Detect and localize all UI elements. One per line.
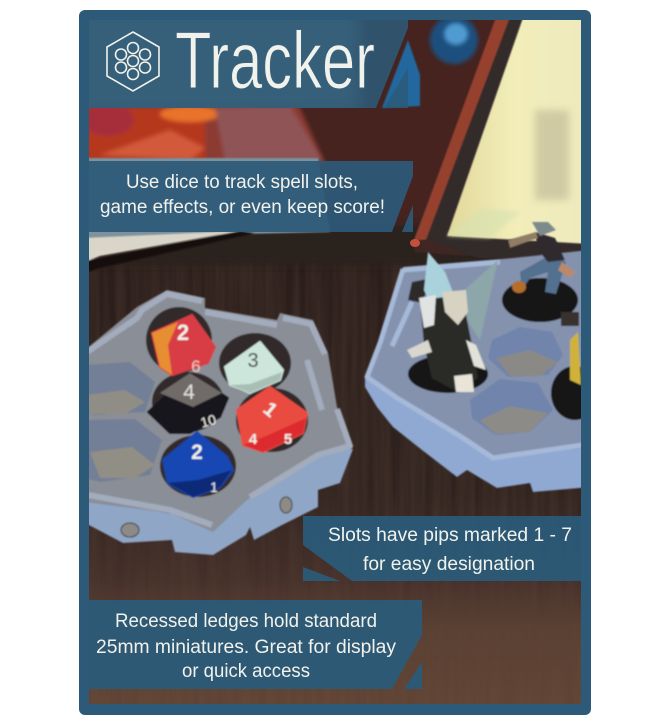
d6 black	[148, 373, 228, 433]
d6 orange	[152, 315, 215, 376]
callout text: Slots have pips marked 1 - 7	[328, 525, 572, 546]
frame	[79, 10, 591, 715]
tray raised rim	[87, 294, 350, 525]
callout text: or quick access	[182, 661, 310, 682]
tray raised rim	[367, 262, 590, 458]
tray top	[85, 290, 353, 532]
d6 red	[237, 387, 307, 452]
callout text	[96, 611, 396, 682]
callout text: Recessed ledges hold standard	[115, 611, 377, 632]
empty well	[470, 379, 553, 435]
callout text: game effects, or even keep score!	[100, 197, 385, 218]
backdrop behind title	[89, 20, 359, 108]
well with base	[502, 278, 578, 322]
well with base	[550, 366, 581, 421]
icon: hexagonal tray logo	[107, 32, 159, 91]
d6 red: 5	[284, 431, 292, 448]
d6 orange: 6	[191, 357, 201, 376]
d6 blue	[163, 432, 233, 497]
dice in background	[382, 16, 478, 108]
callout text	[328, 525, 572, 575]
callout: dice tracking	[89, 161, 413, 232]
callout text: for easy designation	[363, 554, 535, 575]
dark tray hole	[408, 278, 426, 303]
d6 blue: 1	[210, 479, 218, 495]
callout: pips	[303, 516, 581, 581]
title: Tracker	[175, 16, 375, 106]
callout text	[100, 172, 385, 218]
d6 mint	[225, 342, 283, 393]
table	[85, 15, 581, 704]
d6 orange: 2	[177, 320, 189, 345]
tray sides	[85, 449, 353, 555]
well with base	[408, 355, 488, 393]
d6 red: 1	[259, 398, 281, 422]
panel: photo	[70, 5, 599, 704]
red dice mat	[89, 108, 326, 161]
empty well	[488, 327, 563, 377]
d6 mint: 3	[247, 350, 259, 372]
left tray	[85, 290, 353, 555]
well shadows	[146, 307, 308, 497]
banner: title	[89, 16, 408, 108]
d6 blue: 2	[191, 441, 203, 464]
empty wells	[85, 362, 162, 482]
tray top	[365, 250, 590, 460]
callout: miniatures	[89, 600, 422, 689]
miniature: dragon	[407, 252, 498, 392]
d6 black: 4	[183, 381, 195, 404]
book at left	[85, 158, 330, 273]
callout text: Use dice to track spell slots,	[126, 172, 358, 193]
callout text: 25mm miniatures. Great for display	[96, 637, 396, 658]
tray sides	[365, 377, 590, 492]
d6 red: 4	[249, 431, 258, 448]
open book	[410, 12, 590, 258]
d6 black: 10	[199, 411, 218, 431]
right tray	[365, 222, 599, 492]
magnets	[121, 497, 292, 537]
infographic	[79, 10, 591, 715]
miniature: adventurer	[508, 222, 581, 385]
